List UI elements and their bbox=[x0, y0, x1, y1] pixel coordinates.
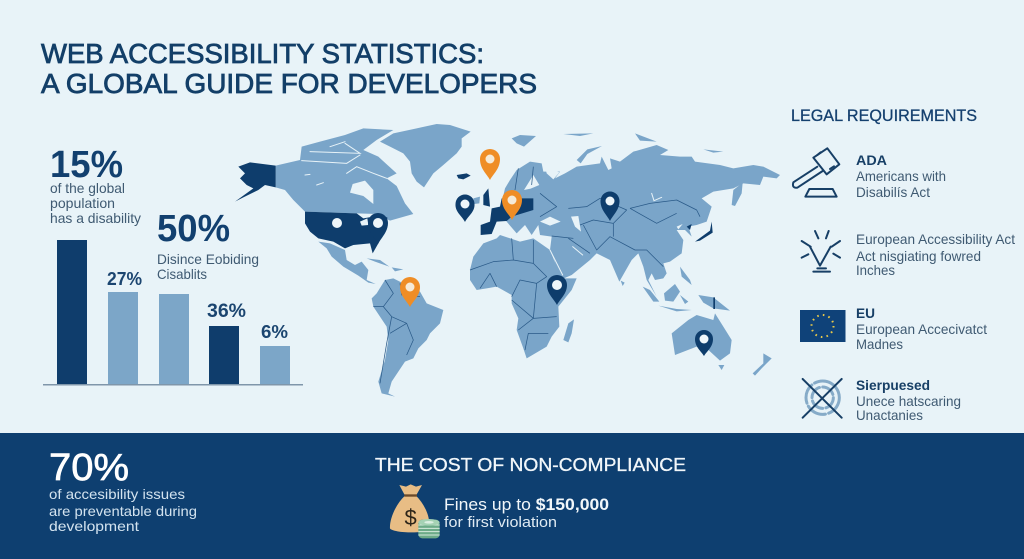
icon: money bag: $ bbox=[405, 505, 417, 530]
text: fines bbox=[444, 495, 609, 531]
text: eu: European Accecivatct bbox=[856, 321, 987, 337]
icon: eu flag bbox=[800, 310, 846, 342]
text: sierpuesed bbox=[856, 377, 961, 423]
stat: 15 percent: of the global bbox=[50, 180, 125, 196]
stat: 70 percent: of accesibility issues bbox=[49, 486, 185, 502]
text: fines: for first violation bbox=[444, 514, 557, 531]
world map bbox=[235, 124, 780, 397]
text: european accessibility act: Act nisgiating fowred bbox=[856, 248, 981, 264]
text: sierpuesed: Unece hatscaring bbox=[856, 393, 961, 409]
stat: 50 percent bbox=[157, 208, 259, 282]
text: sierpuesed: Sierpuesed bbox=[856, 377, 930, 393]
map: eurasia, africa, oceania bbox=[470, 133, 780, 376]
text: ada: Americans with bbox=[856, 168, 946, 184]
title: A GLOBAL GUIDE FOR DEVELOPERS bbox=[41, 68, 537, 99]
stat: 50 percent: 50% bbox=[157, 208, 230, 250]
text: european accessibility act bbox=[856, 231, 1015, 278]
map pin: usa central dot bbox=[332, 218, 342, 228]
text: european accessibility act: Inches bbox=[856, 262, 895, 278]
stat: 15 percent: population bbox=[50, 195, 115, 211]
title: WEB ACCESSIBILITY STATISTICS: bbox=[41, 38, 484, 69]
icon: broken check bbox=[802, 231, 840, 272]
map pin: south america orange bbox=[400, 277, 420, 307]
icon: money bag bbox=[390, 484, 440, 538]
stat: 50 percent: Disince Eobiding bbox=[157, 251, 259, 267]
map pin: east africa navy bbox=[547, 275, 567, 305]
stat: 70 percent: development bbox=[49, 518, 139, 534]
heading: cost of non-compliance: THE COST OF NON-COMPLIANCE bbox=[375, 455, 686, 475]
panel: legal requirements bbox=[791, 106, 1015, 423]
heading: legal requirements: LEGAL REQUIREMENTS bbox=[791, 106, 977, 125]
stat: 70 percent bbox=[49, 447, 197, 534]
text: sierpuesed: Unactanies bbox=[856, 407, 923, 423]
text: ada: ADA bbox=[856, 152, 887, 168]
icon: crossed circle bbox=[803, 379, 842, 418]
text: ada bbox=[856, 152, 946, 200]
map pin: australia navy bbox=[695, 330, 713, 356]
stat: 15 percent: has a disability bbox=[50, 210, 141, 226]
stat: 15 percent bbox=[50, 144, 141, 226]
text: eu: Madnes bbox=[856, 336, 903, 352]
text: eu: EU bbox=[856, 305, 875, 321]
stat: 70 percent: 70% bbox=[49, 447, 129, 489]
bar chart bbox=[43, 240, 303, 386]
stat: 15 percent: 15% bbox=[50, 144, 123, 186]
map pin: north atlantic orange bbox=[480, 149, 500, 180]
stat: 70 percent: are preventable during bbox=[49, 503, 197, 519]
map pin: central asia navy bbox=[600, 192, 620, 221]
bar chart: 27% bbox=[107, 269, 142, 289]
text: ada: Disabilís Act bbox=[856, 184, 930, 200]
title bbox=[41, 38, 537, 99]
map pin: europe orange bbox=[502, 190, 522, 220]
map pin: atlantic navy bbox=[455, 194, 475, 222]
map pin: usa east navy bbox=[368, 213, 388, 244]
bar chart: 6% bbox=[261, 322, 288, 342]
map: americas bbox=[235, 124, 471, 397]
panel: bottom banner bbox=[0, 433, 1024, 559]
text: eu bbox=[856, 305, 987, 352]
text: european accessibility act: European Accessibility Act bbox=[856, 231, 1015, 247]
stat: 50 percent: Cisablits bbox=[157, 266, 207, 282]
icon: gavel bbox=[793, 148, 839, 197]
text: fines: Fines up to $150,000 bbox=[444, 495, 609, 514]
bar chart: 36% bbox=[207, 301, 246, 322]
